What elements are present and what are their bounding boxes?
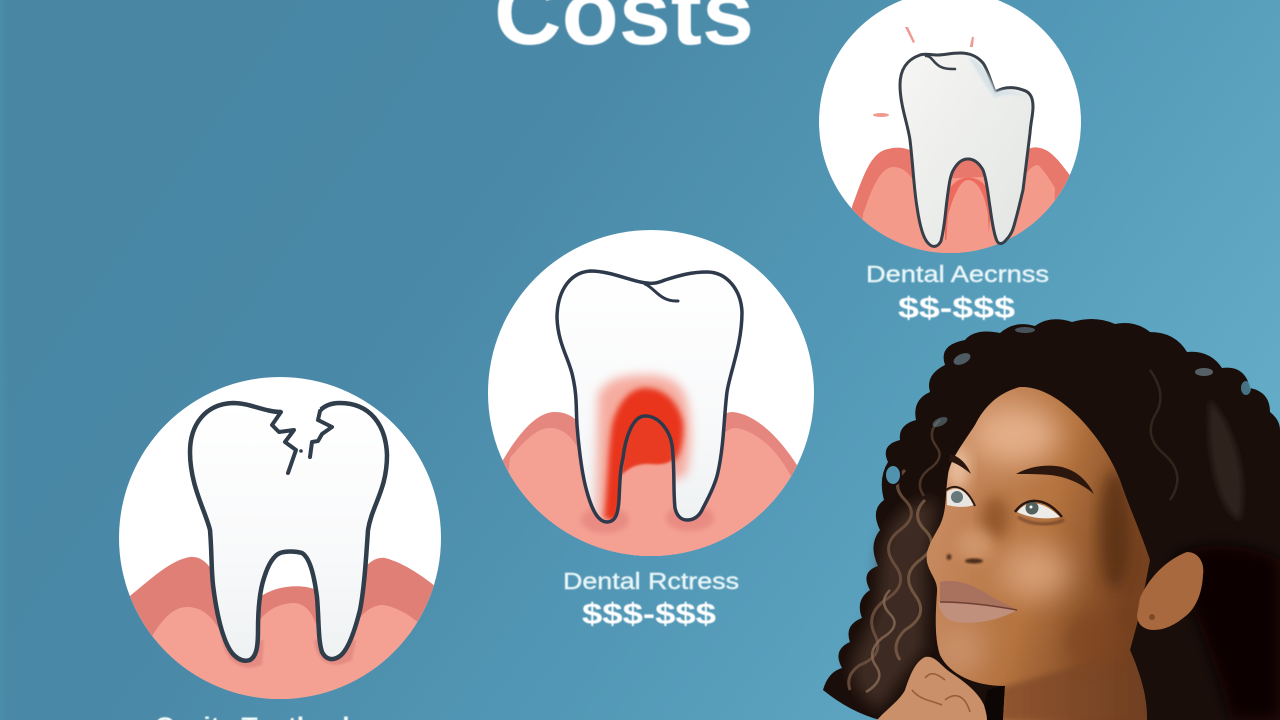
hair mass xyxy=(823,319,1280,720)
price: second tooth: $$$-$$$ xyxy=(582,598,716,631)
circle backdrop xyxy=(819,0,1081,253)
price: third tooth: $$-$$$ xyxy=(898,292,1015,325)
face shading xyxy=(935,405,1150,720)
right eyebrow xyxy=(1016,466,1094,494)
gums xyxy=(502,412,797,556)
pain marks xyxy=(873,27,973,117)
gums xyxy=(852,147,1070,253)
left eyebrow xyxy=(949,454,971,474)
ear xyxy=(1137,552,1203,630)
right eye xyxy=(1015,501,1064,524)
circle backdrop xyxy=(119,377,441,699)
hair highlights xyxy=(849,327,1280,720)
face and neck xyxy=(927,387,1150,720)
hand xyxy=(877,657,987,720)
dark under-jaw area xyxy=(982,685,1005,720)
knuckle lines xyxy=(912,674,970,712)
label: second tooth: Dental Rctress xyxy=(563,568,739,594)
left eye xyxy=(946,487,975,507)
panel: abscess tooth xyxy=(488,230,814,560)
ear stud xyxy=(1149,614,1155,620)
labels xyxy=(155,261,1049,720)
label: third tooth: Dental Aecrnss xyxy=(866,261,1049,287)
crack gap xyxy=(274,408,332,450)
outline and fissure xyxy=(557,271,742,522)
root gap inflammation xyxy=(622,416,672,475)
gums xyxy=(130,556,434,699)
crack lines xyxy=(272,411,332,473)
photo: thoughtful woman xyxy=(823,319,1280,720)
tooth body xyxy=(557,271,742,522)
tooth outline xyxy=(190,403,387,661)
nose xyxy=(946,554,983,564)
chip shading xyxy=(968,57,1028,100)
circle backdrop xyxy=(488,230,814,556)
panel: cracked tooth xyxy=(119,377,441,699)
curl strands xyxy=(849,470,911,690)
pulp inflammation xyxy=(596,375,690,525)
tooth outline xyxy=(900,53,1033,246)
fissure xyxy=(926,56,955,69)
lips xyxy=(938,581,1017,623)
panel: chipped tooth xyxy=(819,0,1081,260)
curl loops showing background xyxy=(952,351,972,367)
